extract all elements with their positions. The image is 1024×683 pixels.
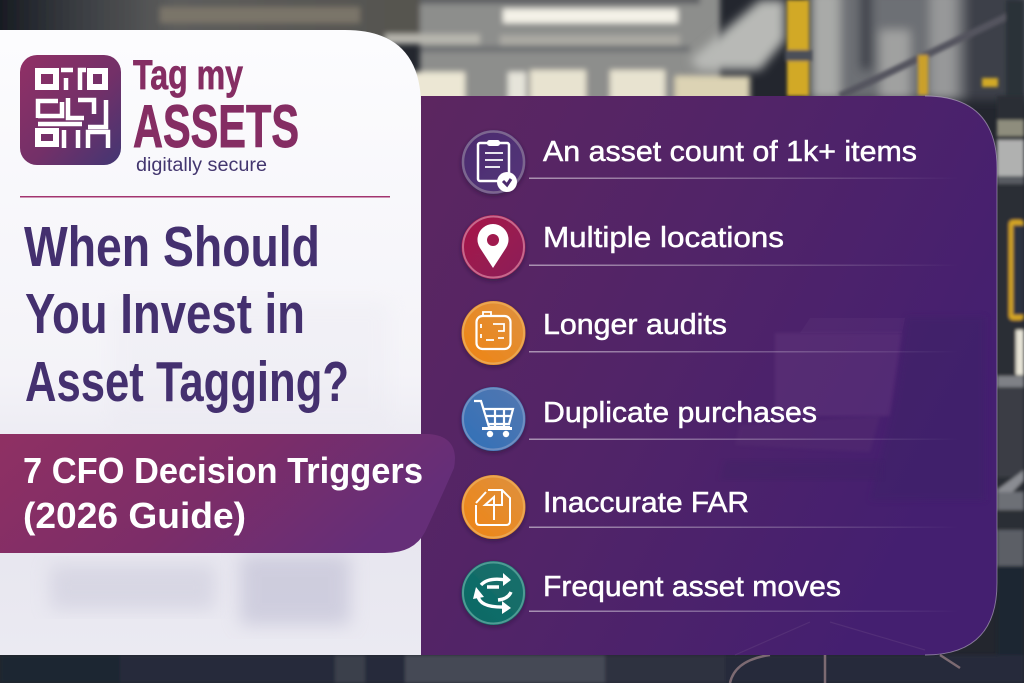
trigger list	[462, 130, 959, 625]
title: When Should	[24, 215, 320, 279]
item: moves	[462, 561, 959, 625]
item: purchases	[462, 387, 959, 451]
item: asset count: An asset count of 1k+ items	[543, 136, 917, 168]
brand name: digitally secure	[136, 155, 267, 176]
subtitle banner: 7 CFO Decision Triggers	[23, 450, 423, 491]
icon: cycle arrows	[462, 561, 526, 625]
title: Asset Tagging?	[25, 350, 349, 414]
icon: audit board	[462, 301, 526, 365]
item: FAR: Inaccurate FAR	[543, 487, 749, 519]
item: locations	[462, 215, 959, 279]
logo	[20, 51, 299, 176]
icon: document	[462, 475, 526, 539]
icon: map pin	[462, 215, 526, 279]
brand name: ASSETS	[133, 93, 299, 160]
title	[24, 215, 349, 414]
item: FAR	[462, 475, 959, 539]
item: locations: Multiple locations	[543, 222, 784, 254]
item: moves: Frequent asset moves	[543, 571, 841, 603]
panel: purple right card	[421, 96, 997, 655]
item: audits	[462, 301, 959, 365]
brand name: Tag my	[133, 51, 243, 98]
icon: shopping cart	[462, 387, 526, 451]
subtitle banner: (2026 Guide)	[23, 495, 246, 536]
item: purchases: Duplicate purchases	[543, 397, 817, 429]
panel: white left card	[0, 30, 421, 655]
icon: clipboard check	[462, 130, 526, 194]
divider	[20, 196, 390, 198]
brand name	[133, 51, 299, 176]
title: You Invest in	[25, 282, 305, 346]
subtitle banner	[0, 434, 455, 553]
icon: QR code badge	[20, 55, 121, 165]
item: asset count	[462, 130, 959, 194]
item: audits: Longer audits	[543, 309, 727, 341]
